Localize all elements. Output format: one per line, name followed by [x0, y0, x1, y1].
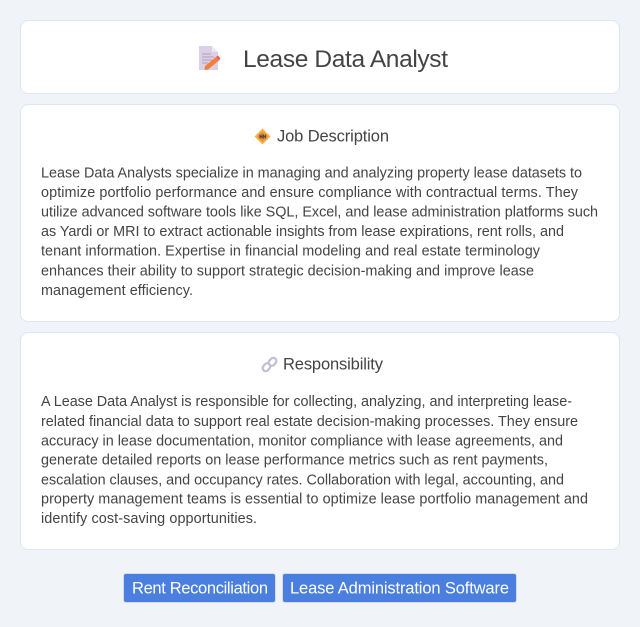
text block: job description — [41, 166, 598, 299]
text block: responsibility: escalation clauses, and occupancy rates. Collaboration with legal, accounting, and — [41, 472, 564, 488]
text block: responsibility: property management teams is essential to optimize lease portfolio management and — [41, 492, 588, 508]
text block: job description: enhances their ability to support strategic decision-making and improve lease — [41, 264, 534, 280]
text block: job description: management efficiency. — [41, 283, 193, 299]
text block: responsibility: generate detailed reports on lease performance metrics such as rent payments, — [41, 452, 548, 468]
text block: responsibility: accuracy in lease documentation, monitor compliance with lease agreements, and — [41, 434, 563, 450]
tag: rent reconciliation — [123, 573, 276, 603]
icon: chain link — [262, 356, 278, 372]
tag: lease administration software — [282, 573, 517, 603]
heading: responsibility: Responsibility — [283, 356, 384, 374]
title: Lease Data Analyst — [243, 46, 448, 73]
text block: job description: optimize portfolio performance and ensure compliance with contractual terms. They — [41, 185, 579, 201]
tag: rent reconciliation: Rent Reconciliation — [132, 580, 268, 598]
text block: job description: as Yardi or MRI to extract actionable insights from lease expirations, rent rolls, and — [41, 224, 564, 240]
heading: job description: Job Description — [277, 128, 389, 146]
text block: job description: utilize advanced software tools like SQL, Excel, and lease administration platforms such — [41, 204, 598, 220]
text block: job description: Lease Data Analysts specialize in managing and analyzing property lease datasets to — [41, 166, 582, 182]
text block: responsibility: A Lease Data Analyst is responsible for collecting, analyzing, and interpreting lease- — [41, 394, 572, 410]
tag: lease administration software: Lease Administration Software — [290, 580, 509, 598]
text block: job description: tenant information. Expertise in financial modeling and real estate terminology — [41, 244, 541, 260]
panel: title header — [20, 20, 620, 94]
panel: job description — [20, 104, 620, 322]
text block: responsibility: identify cost-saving opportunities. — [41, 511, 257, 527]
icon: orange diamond — [254, 128, 270, 144]
panel: responsibility — [20, 332, 620, 550]
icon: document with pencil — [199, 46, 220, 70]
text block: responsibility: related financial data to support real estate decision-making processes. They ensure — [41, 414, 578, 430]
